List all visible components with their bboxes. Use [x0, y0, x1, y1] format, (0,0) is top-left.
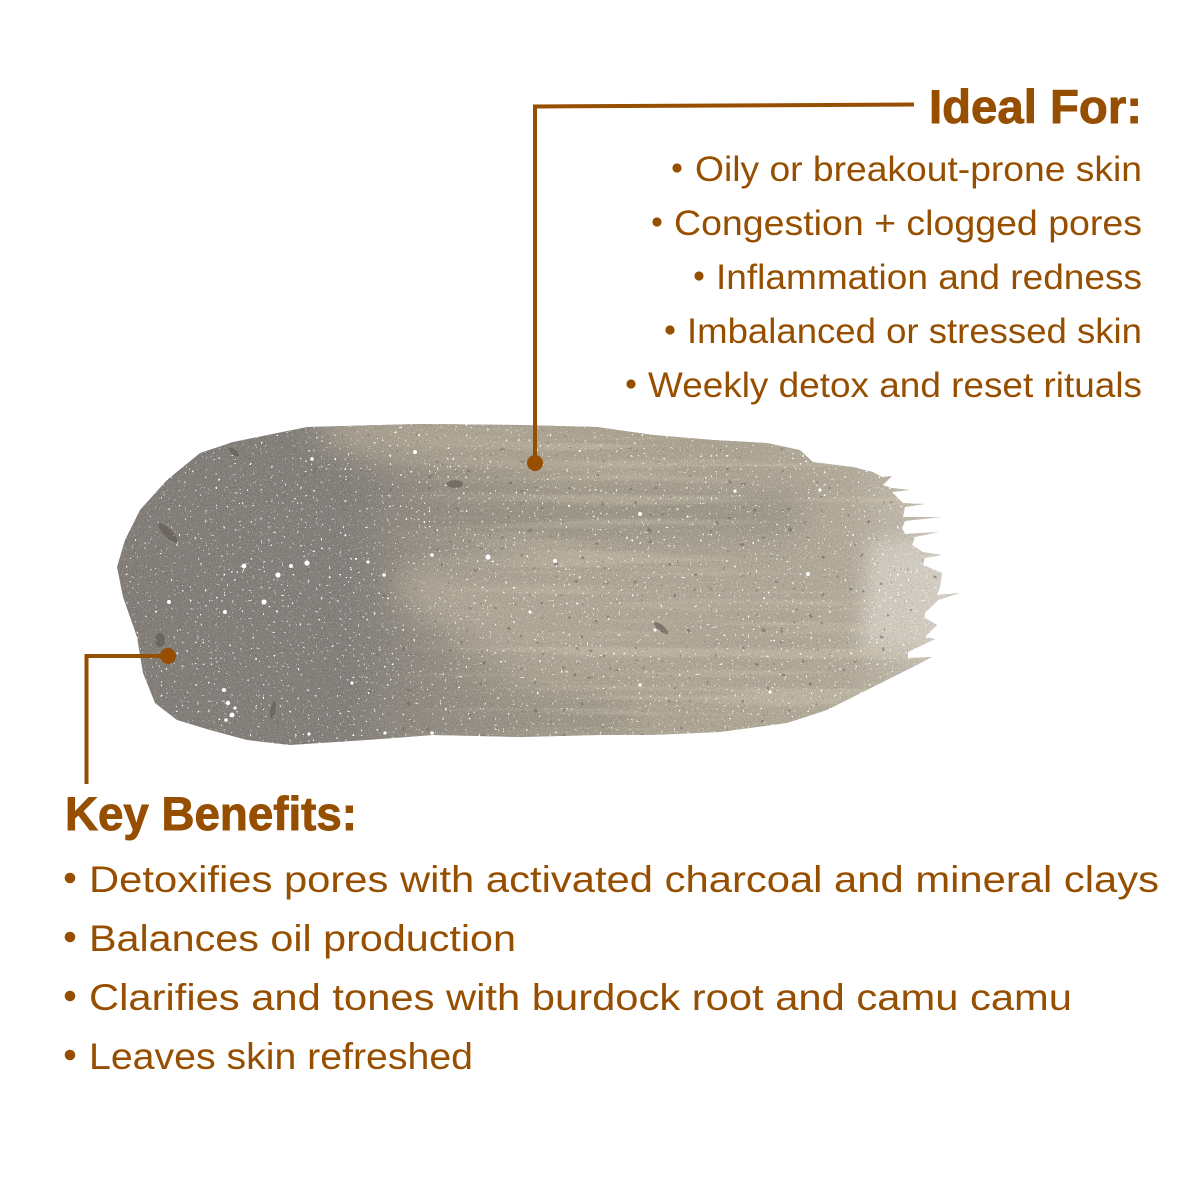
- list item: weekly detox: Weekly detox and reset rituals: [648, 366, 1142, 405]
- dark grain: [118, 424, 958, 745]
- heading: ideal for: Ideal For:: [929, 80, 1142, 133]
- dark specks: [134, 424, 947, 744]
- list item: clarifies: Clarifies and tones with burdock root and camu camu: [89, 977, 1072, 1018]
- dark gouges: [155, 446, 670, 719]
- list item: imbalanced skin: Imbalanced or stressed skin: [687, 312, 1142, 351]
- product swatch: charcoal clay smear: [117, 424, 960, 745]
- connector: Key Benefits: [86, 648, 176, 784]
- panel: key benefits: [65, 787, 1159, 1077]
- glitter sparkles: [117, 424, 944, 745]
- tan top band: [320, 410, 760, 466]
- connector: Ideal For: [527, 104, 914, 471]
- brush streaks: [450, 442, 896, 729]
- gray bottom edge: [383, 699, 618, 739]
- gray middle band: [496, 488, 804, 542]
- list item: detoxifies: Detoxifies pores with activated charcoal and mineral clays: [89, 859, 1159, 900]
- list item: inflammation: Inflammation and redness: [716, 258, 1142, 297]
- bright highlights: [167, 450, 822, 736]
- heading: key benefits: Key Benefits:: [65, 787, 357, 840]
- tan lower band: [390, 558, 556, 664]
- pale tip: [860, 540, 960, 650]
- panel: ideal for: [626, 80, 1142, 405]
- fine grain: [118, 424, 948, 745]
- list item: balances: Balances oil production: [89, 918, 516, 959]
- list item: leaves: Leaves skin refreshed: [89, 1036, 473, 1077]
- list item: oily skin: Oily or breakout-prone skin: [695, 150, 1142, 189]
- list item: congestion: Congestion + clogged pores: [674, 204, 1142, 243]
